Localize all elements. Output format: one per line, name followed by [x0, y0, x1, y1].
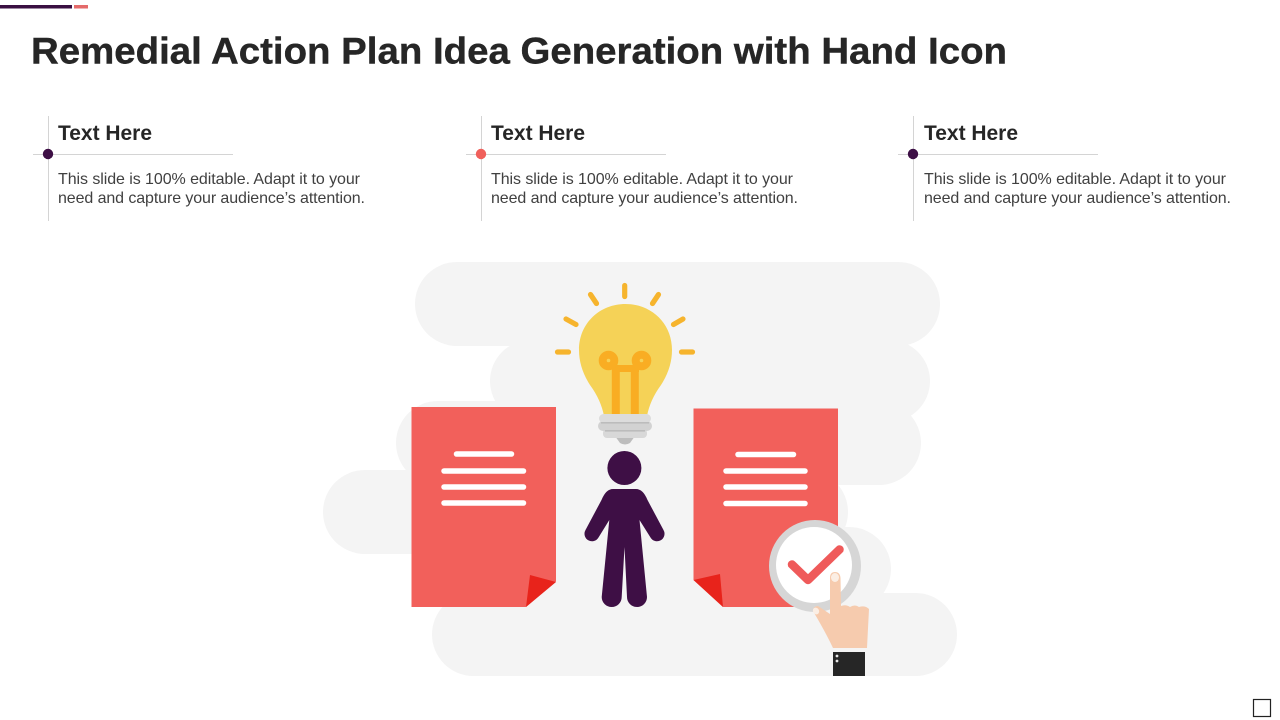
page fold	[694, 574, 723, 607]
page fold	[526, 575, 556, 607]
bulb glass	[579, 304, 672, 416]
background cloud shape	[323, 262, 957, 676]
body text 2	[491, 171, 798, 207]
document lines	[444, 454, 524, 503]
fingernail	[831, 573, 839, 582]
panel: text block 1	[33, 116, 365, 221]
bulb rays	[558, 286, 692, 352]
shirt cuff	[833, 652, 865, 676]
body text 1: This slide is 100% editable. Adapt it to your	[58, 171, 361, 188]
check mark	[792, 550, 840, 580]
icon: left document	[412, 407, 556, 607]
marker dot 3	[908, 149, 918, 159]
title: Remedial Action Plan Idea Generation with Hand Icon	[31, 30, 1007, 72]
body text 3: need and capture your audience’s attention.	[924, 190, 1231, 207]
icon: person	[584, 451, 665, 607]
marker dot 1	[43, 149, 53, 159]
panel: text block 2	[466, 116, 798, 221]
thumbnail	[812, 606, 820, 616]
icon: pointing hand	[812, 572, 869, 676]
icon: check mark badge	[769, 520, 861, 612]
icon: light bulb	[558, 286, 692, 444]
cuff buttons	[836, 655, 838, 662]
body text 2: This slide is 100% editable. Adapt it to your	[491, 171, 794, 188]
marker dot 2	[476, 149, 486, 159]
body text 2: need and capture your audience’s attention.	[491, 190, 798, 207]
corner square marker	[1254, 700, 1270, 716]
heading 2: Text Here	[491, 122, 585, 145]
bulb base	[598, 414, 652, 444]
document lines	[726, 454, 805, 504]
body text 1: need and capture your audience’s attention.	[58, 190, 365, 207]
heading 1: Text Here	[58, 122, 152, 145]
body text 1	[58, 171, 365, 207]
panel: text block 3	[898, 116, 1231, 221]
heading 3: Text Here	[924, 122, 1018, 145]
body text 3: This slide is 100% editable. Adapt it to your	[924, 171, 1227, 188]
top accent bars	[0, 5, 88, 8]
bulb filament	[603, 355, 647, 415]
icon: right document	[694, 408, 838, 607]
body text 3	[924, 171, 1231, 207]
